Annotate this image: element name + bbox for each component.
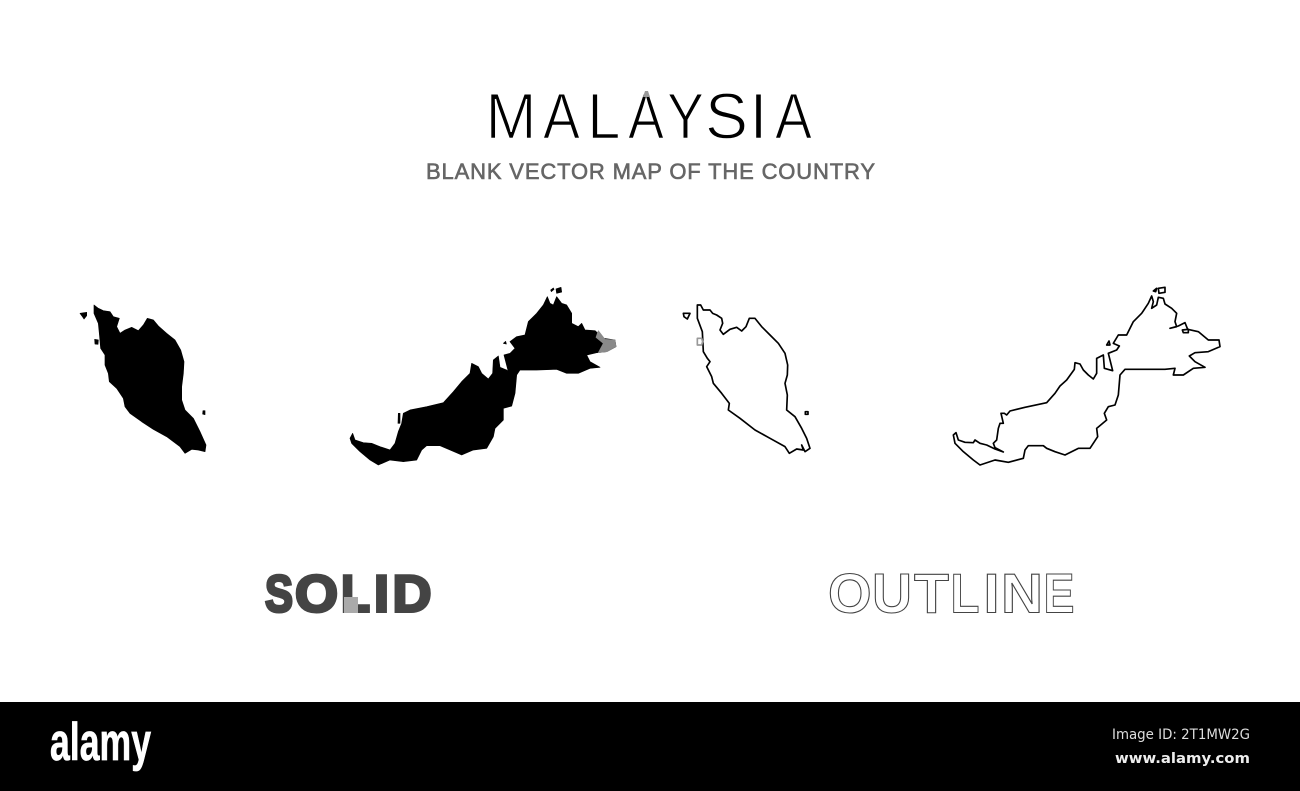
outline map: peninsular Malaysia	[683, 305, 810, 453]
website: www.alamy.com	[1115, 751, 1250, 767]
label: outline: T	[914, 562, 949, 624]
label: solid	[265, 566, 432, 624]
label: solid: S	[265, 566, 293, 624]
label: solid: I	[374, 566, 389, 624]
solid map: east Malaysia	[350, 287, 616, 465]
title: Y	[667, 80, 704, 152]
grey letter-like mark	[697, 338, 703, 345]
label: outline: I	[984, 562, 1000, 624]
footer bar	[0, 702, 1300, 791]
title: M	[486, 80, 536, 152]
title: A	[628, 80, 665, 152]
title: S	[705, 80, 748, 152]
image id: Image ID: 2T1MW2G	[1112, 727, 1250, 743]
label: solid: D	[392, 566, 432, 624]
label: solid: O	[295, 566, 338, 624]
title: I	[750, 80, 768, 152]
solid map: peninsular Malaysia	[80, 305, 206, 453]
label: outline: L	[950, 562, 980, 624]
label: outline: E	[1044, 562, 1074, 624]
title	[486, 80, 813, 152]
title: A	[543, 80, 581, 152]
subtitle: BLANK VECTOR MAP OF THE COUNTRY	[426, 159, 875, 184]
title: A	[775, 80, 813, 152]
label: outline: U	[872, 562, 912, 624]
label: outline: O	[828, 562, 872, 624]
title: L	[587, 80, 620, 152]
grey tip of Sabah	[596, 331, 616, 353]
label: outline: N	[1001, 562, 1043, 624]
label: solid: L	[341, 566, 370, 624]
outline map: east Malaysia	[953, 287, 1220, 465]
logo: alamy: alamy	[50, 713, 151, 772]
